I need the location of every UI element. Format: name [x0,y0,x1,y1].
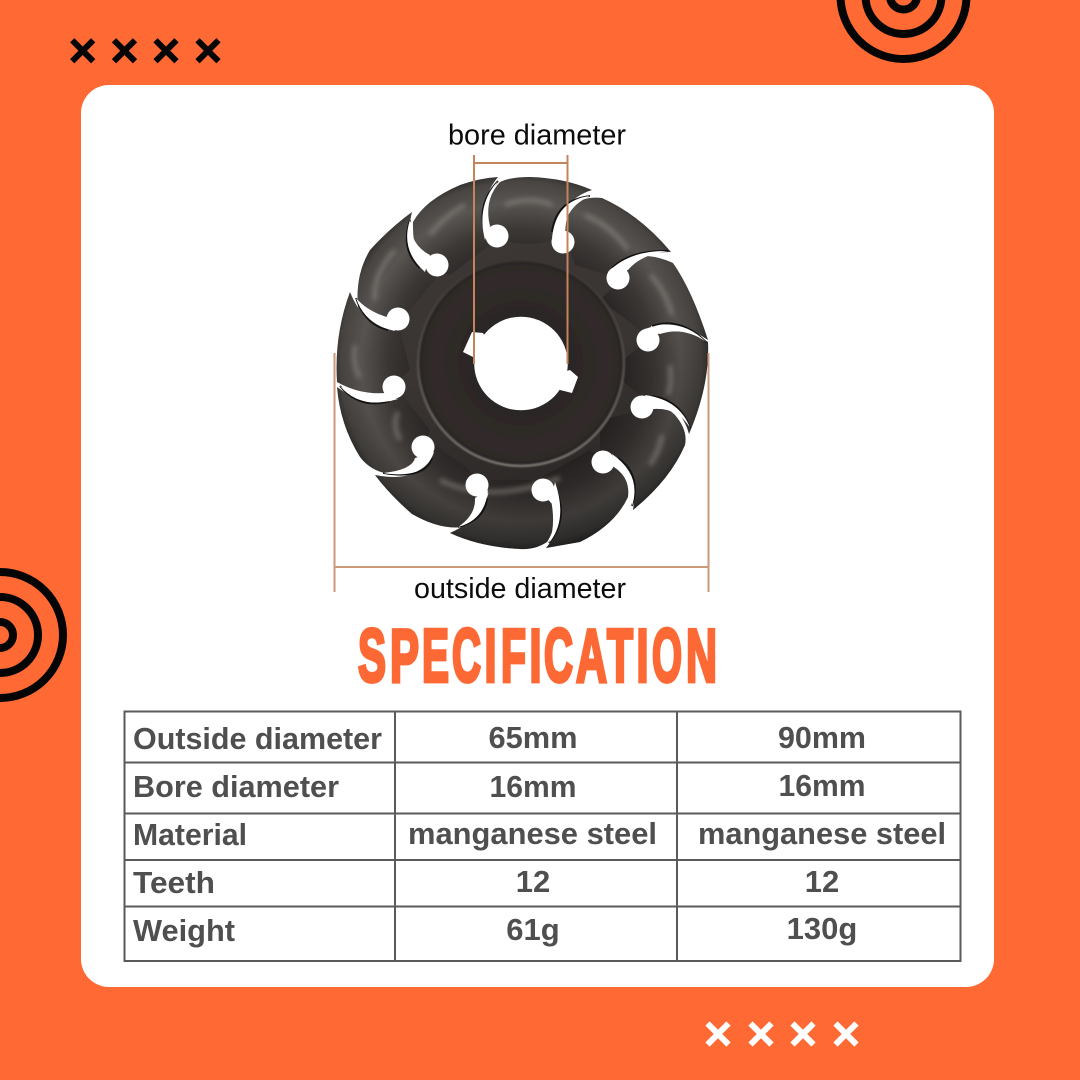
row: bore diameter: Bore diameter [133,769,339,804]
row: weight: Weight [133,913,235,948]
bore diameter label: bore diameter [448,120,626,152]
row: weight [133,911,857,948]
specification heading: I [484,614,496,698]
outside diameter dimension lines [334,353,708,592]
row: material: manganese steel [408,816,657,851]
bore diameter dimension lines [474,155,568,364]
specification heading: O [652,614,682,698]
gullet slots [340,181,706,543]
row: teeth: 12 [805,864,839,899]
row: bore diameter [133,768,866,804]
specification heading: I [530,614,542,698]
white cross marks bottom right [708,1024,856,1044]
row: outside diameter: 90mm [778,720,866,755]
row: bore diameter: 16mm [490,769,576,804]
specification heading: N [686,614,717,698]
black cross marks top left [72,40,218,61]
tooth highlights [354,200,672,492]
row: teeth [133,864,839,900]
row: material [133,816,946,852]
specification table [124,712,960,961]
row: material: Material [133,817,247,852]
row: weight: 130g [787,911,857,946]
row: weight: 61g [506,912,560,947]
specification heading: S [358,614,386,698]
row: teeth: 12 [516,864,550,899]
specification heading: T [607,614,633,698]
concentric circles left [0,572,63,698]
row: bore diameter: 16mm [778,768,866,803]
specification heading: C [544,614,573,698]
specification heading: F [501,614,526,698]
lower shading [348,344,708,550]
hub [418,260,624,466]
disc body [386,227,656,497]
teeth [337,177,708,549]
specification heading: I [636,614,648,698]
outside diameter label: outside diameter [414,573,626,605]
specification heading: C [452,614,481,698]
bore hole [463,317,578,410]
row: outside diameter [133,720,866,756]
gullet slot edges [340,181,706,543]
row: teeth: Teeth [133,865,215,900]
row: outside diameter: Outside diameter [133,721,382,756]
concentric circles top right [840,0,966,59]
row: material: manganese steel [698,816,946,851]
saw disc product image [330,170,715,555]
table grid [124,712,960,961]
specification heading: P [390,614,419,698]
row: outside diameter: 65mm [488,720,578,755]
specification heading: A [576,614,607,698]
specification heading: E [422,614,449,698]
white card panel [81,85,994,987]
